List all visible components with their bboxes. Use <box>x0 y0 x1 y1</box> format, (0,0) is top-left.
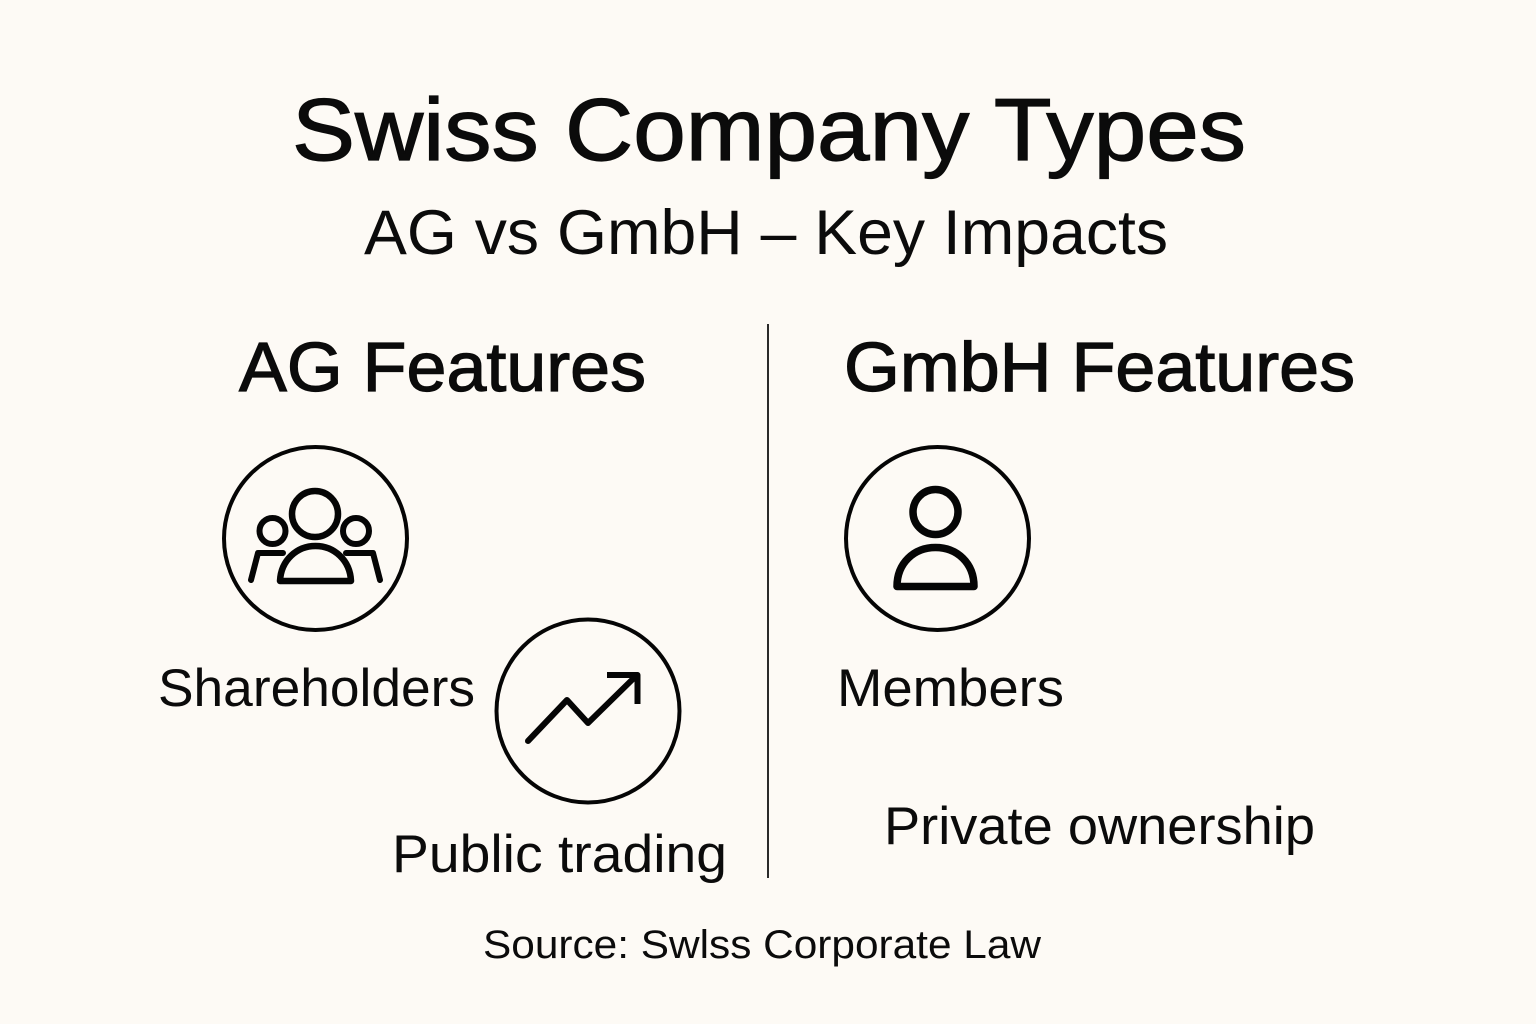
label: Public trading: Public trading <box>392 825 727 884</box>
subtitle: AG vs GmbH – Key Impacts <box>364 198 1168 268</box>
label: Shareholders: Shareholders <box>158 659 475 718</box>
label: Private ownership: Private ownership <box>884 797 1315 856</box>
heading: GmbH Features: GmbH Features <box>844 328 1355 406</box>
source note: Source: Swlss Corporate Law <box>483 923 1041 967</box>
icon: member <box>846 447 1029 630</box>
icon: public trading chart arrow <box>496 620 680 802</box>
heading: AG Features: AG Features <box>239 328 646 406</box>
label: Members: Members <box>837 659 1064 718</box>
icon: shareholders <box>224 447 407 630</box>
title: Swiss Company Types <box>292 80 1246 179</box>
center divider <box>767 324 769 878</box>
